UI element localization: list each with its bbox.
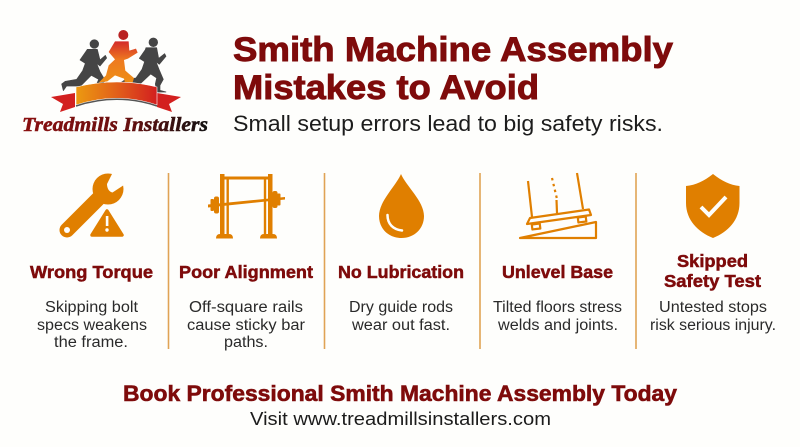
icon: ribbon banner — [51, 82, 181, 112]
footer website: Visit www.treadmillsinstallers.com — [250, 408, 551, 429]
panel: skipped safety test — [650, 174, 776, 334]
description: specs weakens — [37, 317, 147, 334]
description: paths. — [224, 334, 268, 351]
panel: no lubrication — [338, 174, 464, 334]
description: Untested stops — [659, 299, 767, 316]
title: Smith Machine Assembly — [233, 31, 673, 69]
icon: shield with check — [686, 174, 740, 238]
description — [37, 299, 147, 351]
heading: Skipped — [677, 251, 748, 271]
panel: poor alignment — [179, 174, 313, 351]
title: Mistakes to Avoid — [233, 69, 539, 107]
description — [187, 299, 305, 351]
icon: machine on tilted floor — [520, 173, 596, 238]
description: the frame. — [54, 334, 128, 351]
heading — [664, 251, 761, 291]
description: cause sticky bar — [187, 317, 305, 334]
description — [650, 299, 776, 334]
description: welds and joints. — [497, 317, 618, 334]
description: Off-square rails — [189, 299, 303, 316]
subtitle: Small setup errors lead to big safety risks. — [233, 111, 663, 136]
description: Skipping bolt — [45, 299, 139, 316]
heading: Poor Alignment — [179, 262, 313, 282]
description: Dry guide rods — [349, 299, 453, 316]
description: wear out fast. — [351, 317, 450, 334]
logo wordmark: Treadmills Installers — [22, 114, 208, 136]
icon: misaligned smith machine — [208, 174, 285, 238]
footer call to action: Book Professional Smith Machine Assembly Today — [123, 381, 677, 406]
description: Tilted floors stress — [493, 299, 622, 316]
description — [493, 299, 622, 334]
description: risk serious injury. — [650, 317, 776, 334]
icon: three runners — [62, 30, 166, 95]
logo: Treadmills Installers — [22, 30, 208, 136]
title — [233, 31, 673, 107]
heading: No Lubrication — [338, 262, 464, 282]
panel: wrong torque — [30, 170, 153, 351]
panel: unlevel base — [493, 173, 622, 334]
icon: wrench with warning — [64, 170, 130, 235]
heading: Wrong Torque — [30, 262, 153, 282]
heading: Unlevel Base — [502, 262, 613, 282]
description — [349, 299, 453, 334]
heading: Safety Test — [664, 271, 761, 291]
icon: oil drop — [379, 174, 424, 238]
